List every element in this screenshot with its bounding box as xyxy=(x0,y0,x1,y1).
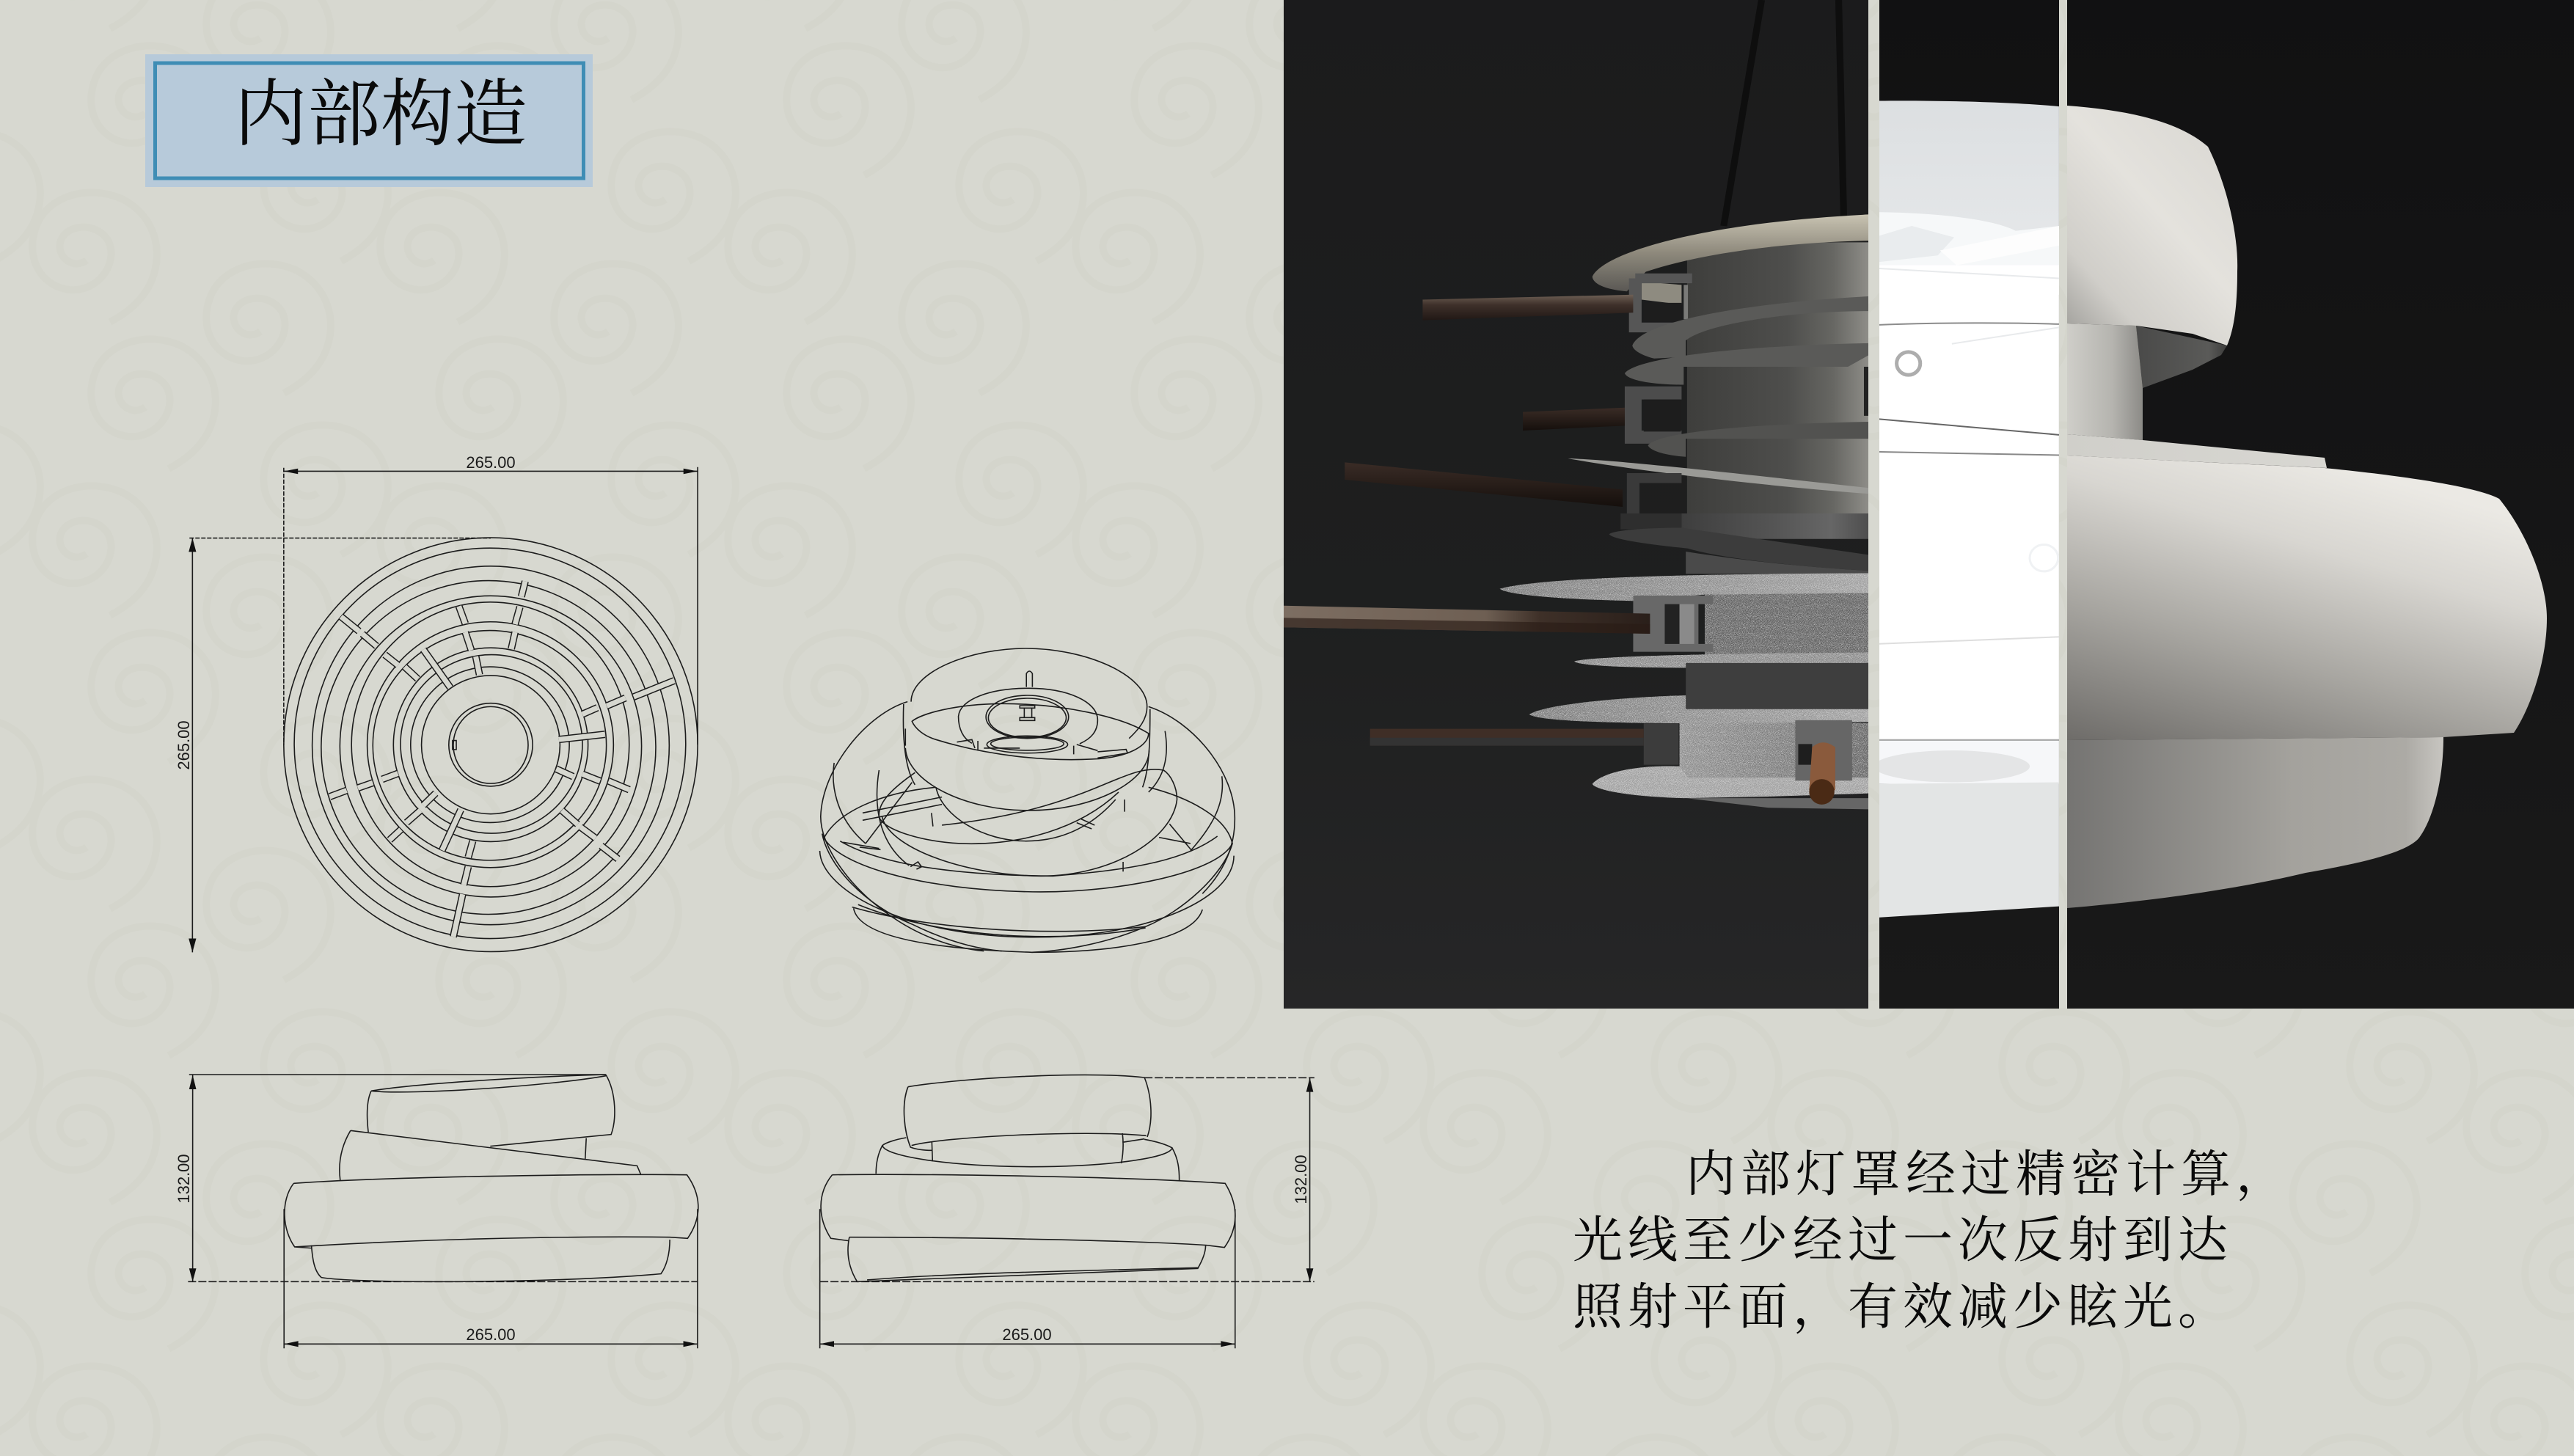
render panel: glowing middle slice xyxy=(1874,0,2059,1009)
lower lamp interior xyxy=(1284,513,1868,809)
technical drawing: isometric wireframe xyxy=(820,648,1235,952)
disc 4 xyxy=(1648,422,1868,457)
top shade xyxy=(2067,106,2237,345)
bracket 2 xyxy=(1633,393,1681,437)
cylinder 5 xyxy=(1705,591,1868,655)
main band xyxy=(2067,456,2547,740)
bracket 4 xyxy=(1633,596,1713,652)
upper slice xyxy=(1879,100,2059,513)
dimension label: height: 265.00 xyxy=(175,720,193,770)
dimension lines xyxy=(192,467,698,952)
rod 2 xyxy=(1523,408,1625,431)
lower tier xyxy=(2067,737,2443,908)
title: 内部构造 xyxy=(145,54,593,187)
text block: description: 照射平面，有效减少眩光。 xyxy=(1573,1279,2233,1335)
rod 4 xyxy=(1284,606,1650,634)
dimensions xyxy=(189,1075,698,1348)
disc 2 xyxy=(1632,296,1868,359)
text block: description: 内部灯罩经过精密计算， xyxy=(1686,1146,2291,1202)
radial struts xyxy=(330,582,674,937)
lower slice xyxy=(1874,513,2059,918)
dimension label: side width: 265.00 xyxy=(1002,1325,1052,1344)
bracket 3 xyxy=(1633,478,1681,513)
dimension label: front height: 132.00 xyxy=(175,1154,193,1204)
hanging cables xyxy=(1724,0,1843,226)
underside of top shade xyxy=(2136,326,2227,388)
dimension label: front width: 265.00 xyxy=(466,1325,516,1344)
small ring xyxy=(2067,434,2327,468)
rod 3 xyxy=(1345,462,1623,507)
render panel: white lamp exterior, right slice xyxy=(2067,0,2574,1009)
stem xyxy=(2067,323,2143,440)
dimension label: width: 265.00 xyxy=(466,453,516,472)
disc 7 xyxy=(1574,653,1868,667)
dimension label: side height: 132.00 xyxy=(1292,1155,1310,1204)
disc 5 xyxy=(1609,528,1868,571)
front bracket xyxy=(1795,720,1852,780)
text block: description: 光线至少经过一次反射到达 xyxy=(1573,1212,2233,1268)
disc 9 xyxy=(1593,766,1868,798)
rod 5 xyxy=(1370,729,1644,746)
cylinders xyxy=(1687,242,1868,513)
render panel: internal structure, left slice xyxy=(1284,0,1868,1009)
technical drawing: top view with dimensions xyxy=(175,453,698,952)
disc 8 xyxy=(1529,695,1868,723)
bracket 1 xyxy=(1642,282,1681,304)
thin disc xyxy=(1568,458,1868,494)
disc 6 xyxy=(1499,574,1868,601)
technical drawing: side elevation xyxy=(820,1075,1315,1348)
dimensions xyxy=(820,1078,1310,1348)
rod 1 xyxy=(1422,295,1633,321)
upper lamp interior xyxy=(1345,0,1868,513)
title: 内部构造: 内部构造 xyxy=(234,74,527,156)
top disc xyxy=(1593,214,1868,291)
disc 3 xyxy=(1625,343,1868,385)
top view rings and struts xyxy=(189,467,698,952)
cylinder 6 xyxy=(1686,663,1868,709)
cylinder 7 xyxy=(1680,722,1868,787)
back bracket xyxy=(1644,723,1678,765)
text block: description xyxy=(1573,1146,2291,1335)
front rod xyxy=(1809,742,1835,790)
technical drawing: front elevation xyxy=(175,1075,698,1348)
